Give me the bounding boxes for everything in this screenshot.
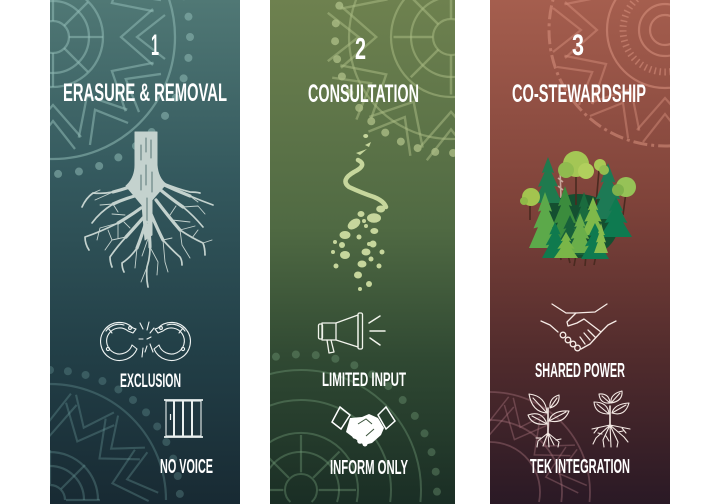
panel: erasure and removal: 1 <box>151 29 159 62</box>
icon: dissolving stream <box>331 134 386 291</box>
mandala: bottom <box>0 370 180 504</box>
panel: erasure and removal <box>50 0 240 504</box>
icon: seedling with large roots <box>592 391 630 447</box>
mandala: bottom <box>466 392 590 502</box>
icon: forest <box>520 151 636 266</box>
icon: broken handcuffs <box>101 322 190 360</box>
mandala: top <box>549 0 720 146</box>
icon: solid handshake <box>332 407 395 446</box>
panel: consultation <box>270 0 455 504</box>
icon: megaphone <box>318 313 385 353</box>
number 3: 3 <box>572 29 584 62</box>
mandala: top <box>328 0 574 160</box>
icon: uprooted tree roots <box>82 132 213 287</box>
icon: outline handshake <box>541 304 616 351</box>
icon: barred door <box>164 400 203 437</box>
panel: co-stewardship <box>490 0 670 504</box>
icon: seedling with small roots <box>528 394 569 447</box>
label: exclusion: EXCLUSION <box>120 371 181 392</box>
number 2: 2 <box>355 31 366 66</box>
mandala: top <box>0 0 190 174</box>
mandala: bottom <box>165 354 437 502</box>
